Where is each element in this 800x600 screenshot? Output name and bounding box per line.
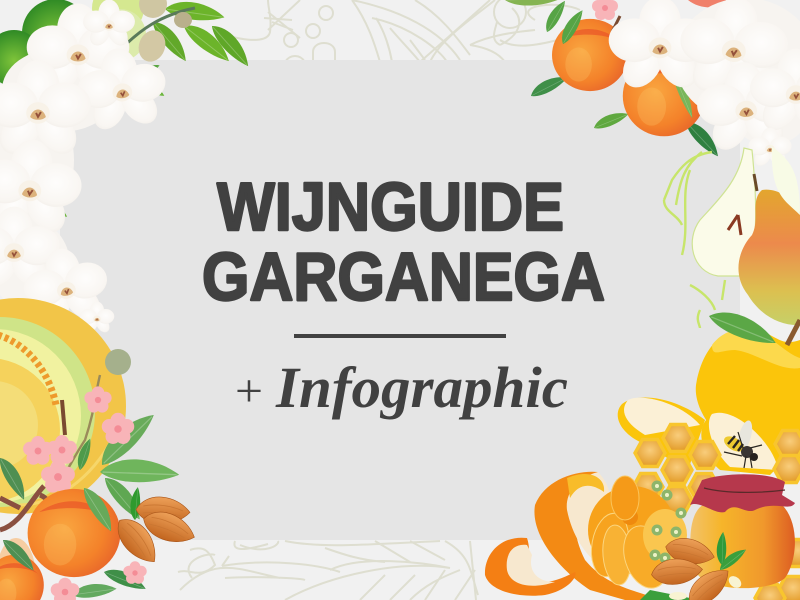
icon: peaches and leaves xyxy=(505,0,732,160)
illustration: honeycomb and jar group xyxy=(485,397,800,600)
icon: limes xyxy=(0,0,146,86)
title xyxy=(202,169,605,315)
illustration: top left lime leaves and stems xyxy=(0,0,255,336)
icon: branch with blossoms and leaves xyxy=(0,375,180,530)
icon: honey jar xyxy=(690,474,795,588)
title line 1: WIJNGUIDE xyxy=(217,169,564,245)
illustration: melon xyxy=(0,298,131,514)
illustration: top right peaches and orchids xyxy=(505,0,800,169)
icon: leaves and buds xyxy=(36,0,255,220)
title line 2: GARGANEGA xyxy=(202,239,605,315)
central grey panel xyxy=(60,60,740,540)
illustration: bottom left blossoms and fruits xyxy=(0,375,199,600)
icon: orange peels xyxy=(485,472,658,600)
icon: bee xyxy=(721,419,762,468)
subtitle xyxy=(235,355,568,420)
icon: jar leaves and almonds xyxy=(640,532,748,600)
icon: honeycomb xyxy=(633,424,800,600)
icon: pear seed xyxy=(728,215,741,235)
icon: peaches xyxy=(0,483,149,600)
icon: apple xyxy=(696,304,800,470)
icon: orchids top right xyxy=(609,0,800,169)
divider line xyxy=(294,334,506,338)
subtitle word: Infographic xyxy=(275,355,568,420)
icon: juice splash xyxy=(664,152,725,328)
icon: green flower specks xyxy=(650,480,686,564)
icon: almonds xyxy=(100,472,199,570)
icon: apple slices xyxy=(618,397,780,475)
icon: orchids top left xyxy=(0,0,172,336)
icon: half pear xyxy=(692,148,756,276)
plus sign: + xyxy=(235,365,263,416)
icon: whole pear xyxy=(738,190,800,325)
illustration: pears xyxy=(664,145,800,470)
icon: mandarin xyxy=(587,476,687,594)
